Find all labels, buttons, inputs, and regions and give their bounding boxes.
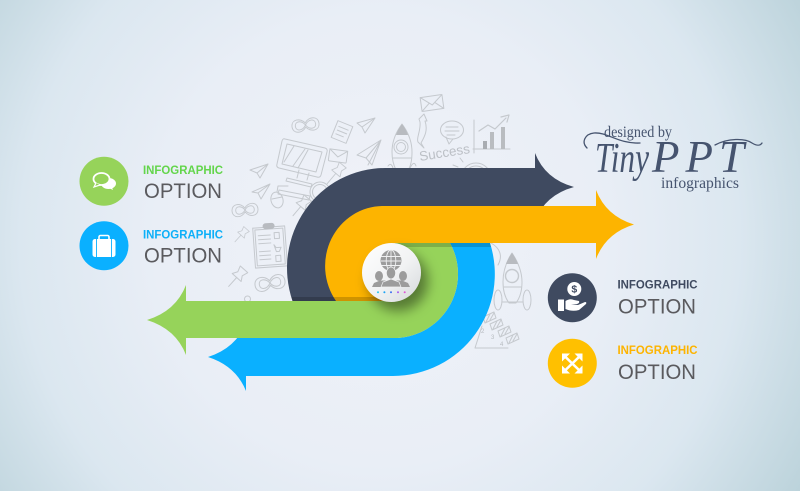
doodle: infinity top (291, 117, 320, 133)
doodle: magnifier (310, 182, 330, 202)
logo line: infographics: infographics (661, 175, 739, 192)
logo swashes (584, 133, 762, 148)
doodle: small pin left (232, 226, 250, 245)
logo name: PPT: PPT (651, 132, 747, 182)
center medallion (362, 243, 428, 311)
doodle: monitor (277, 139, 327, 200)
doodle: gauge (453, 158, 491, 193)
arrow: yellow (325, 190, 634, 301)
arrow: blue (208, 243, 495, 391)
doodle: numbered steps: 2 (481, 329, 485, 335)
logo name: Tiny: Tiny (595, 136, 649, 182)
doodle: envelope middle (328, 149, 348, 163)
doodle: clipboard (252, 222, 287, 268)
label value: OPTION (144, 244, 222, 267)
label value: OPTION (144, 180, 222, 203)
arrow: green (147, 243, 458, 355)
doodle: ring above green arrow (244, 296, 250, 302)
doodle: small paper plane (357, 118, 375, 133)
label: INFOGRAPHIC (143, 229, 223, 241)
doodle: growth chart (473, 115, 510, 153)
label value: OPTION (618, 295, 696, 318)
doodle: chat bubble (440, 121, 464, 144)
fold shadow: lower (291, 297, 395, 301)
doodle: planes left (250, 164, 270, 199)
doodle: pin lower left (224, 265, 248, 290)
doodle sketches behind arrows (224, 95, 531, 348)
doodle: curved arrow (418, 114, 427, 148)
fold shadow: upper (395, 243, 491, 247)
icon: speech bubbles (80, 157, 128, 206)
icon: globe and people (372, 250, 410, 287)
doodle: numbered steps: 4 (500, 342, 504, 348)
doodle: infinity left (231, 203, 259, 217)
doodle: numbered steps (475, 312, 519, 348)
doodle: rocket (388, 124, 416, 170)
doodle: large paper plane (357, 140, 381, 165)
arrow: dark navy (287, 153, 574, 301)
doodle: curve near blue arrow (491, 243, 500, 265)
doodle: infinity lower (254, 273, 286, 293)
label: INFOGRAPHIC (618, 280, 698, 292)
doodle: note (331, 121, 353, 143)
icon: hand with coin (548, 273, 597, 322)
doodle: mouse (269, 186, 288, 209)
option: navy (548, 273, 698, 322)
icon: hand with coin: $ (571, 284, 577, 296)
logo: Tiny PPT (584, 124, 762, 192)
option: yellow (548, 339, 698, 388)
logo line: designed by: designed by (604, 124, 672, 141)
icon: colored dots (377, 291, 406, 293)
label value: OPTION (618, 361, 696, 384)
doodle: pin middle (288, 194, 312, 220)
doodle: pin upper (323, 162, 347, 187)
doodle: numbered steps: 3 (491, 335, 495, 341)
doodle: rocket right (494, 253, 531, 310)
icon: briefcase (80, 221, 128, 270)
doodle: success word: Success (418, 141, 471, 164)
label: INFOGRAPHIC (618, 345, 698, 357)
doodle: envelope top (420, 95, 444, 111)
icon: expand arrows (548, 339, 597, 388)
option: blue (80, 221, 223, 270)
option: green (80, 157, 223, 206)
label: INFOGRAPHIC (143, 165, 223, 177)
